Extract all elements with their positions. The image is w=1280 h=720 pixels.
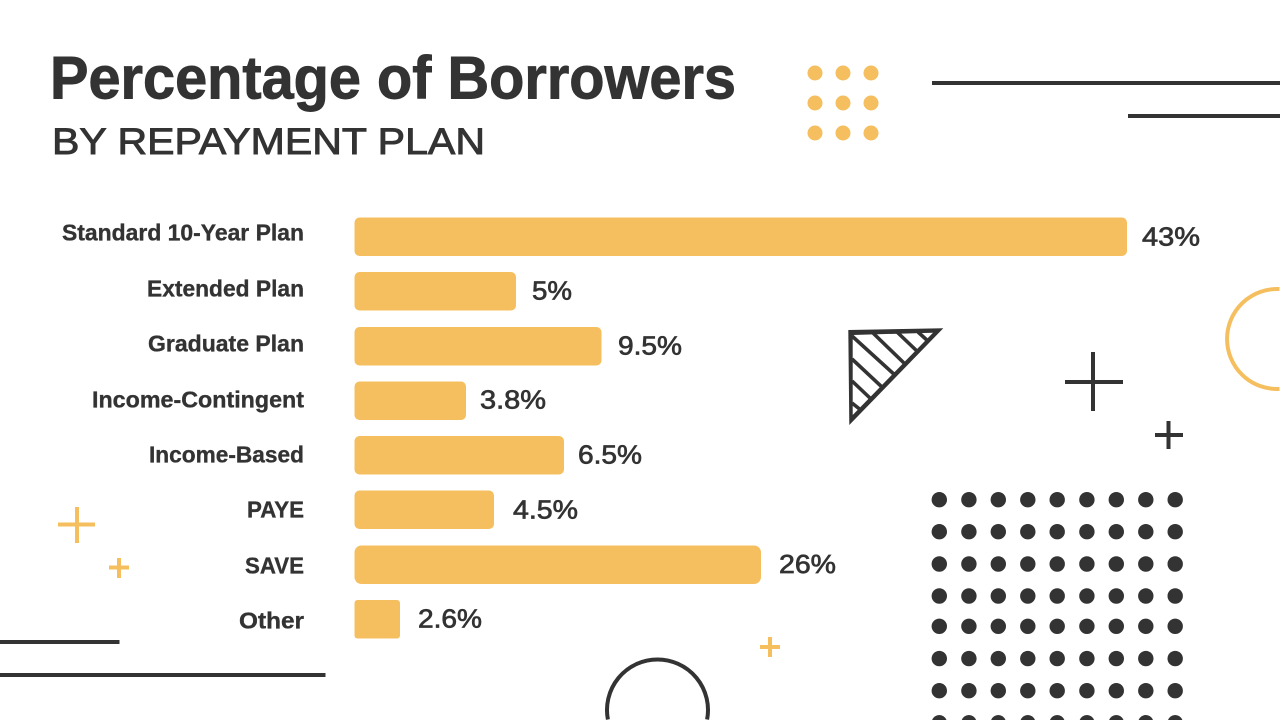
plus: large yellow	[58, 507, 95, 543]
row: SAVE: 26%	[779, 549, 836, 579]
top decorative lines	[932, 81, 1280, 118]
row: PAYE: 4.5%	[513, 494, 578, 524]
row: Income-Based: Income-Based	[149, 442, 304, 468]
row: Standard 10-Year Plan: 43%	[1142, 222, 1200, 252]
row: PAYE: PAYE	[247, 496, 304, 522]
yellow circle outline	[1227, 289, 1280, 389]
dark dot grid	[932, 492, 1183, 720]
row: SAVE: SAVE	[245, 552, 304, 578]
bar chart	[62, 218, 1200, 638]
row: SAVE	[245, 546, 836, 584]
bottom-left decorative lines	[0, 640, 326, 677]
row: Other: Other	[239, 608, 304, 634]
plus: large dark	[1065, 352, 1123, 411]
row: PAYE	[247, 490, 578, 529]
row: Graduate Plan	[148, 327, 682, 366]
row: Graduate Plan: Graduate Plan	[148, 330, 304, 356]
yellow dot grid	[808, 66, 878, 140]
row: Extended Plan: 5%	[532, 276, 572, 306]
row: Income-Contingent: 3.8%	[480, 384, 546, 414]
title: Percentage of Borrowers	[50, 44, 736, 112]
plus: small yellow bottom	[760, 637, 780, 657]
row: Income-Contingent: Income-Contingent	[92, 386, 304, 412]
row: Standard 10-Year Plan: Standard 10-Year Plan	[62, 220, 304, 246]
hatched triangle	[848, 328, 943, 425]
row: Income-Contingent	[92, 382, 546, 420]
row: Income-Based	[149, 436, 642, 474]
subtitle: BY REPAYMENT PLAN	[52, 121, 485, 162]
row: Extended Plan: Extended Plan	[147, 276, 304, 302]
plus: small dark	[1155, 421, 1183, 449]
row: Graduate Plan: 9.5%	[618, 330, 682, 360]
plus: small yellow left	[109, 558, 129, 578]
row: Other: 2.6%	[418, 604, 482, 634]
row: Extended Plan	[147, 272, 572, 310]
row: Other	[239, 600, 482, 638]
row: Income-Based: 6.5%	[578, 440, 642, 470]
row: Standard 10-Year Plan	[62, 218, 1200, 256]
dark circle outline	[607, 660, 708, 720]
